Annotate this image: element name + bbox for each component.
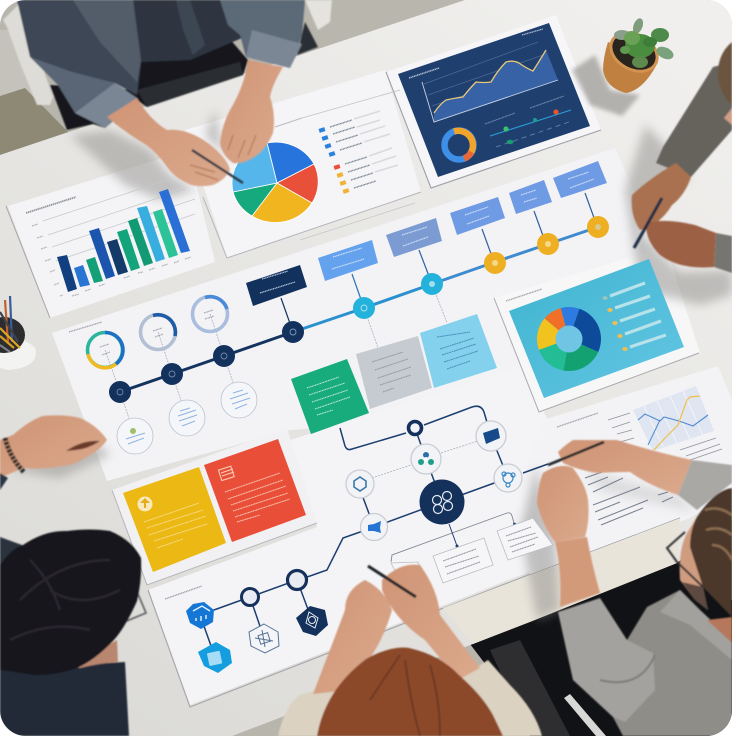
timeline connector lines — [120, 227, 598, 392]
paper: donut chart sheet — [494, 247, 700, 412]
left sleeve — [17, 0, 141, 95]
node: hub — [420, 480, 464, 524]
box: blue 5 — [553, 161, 607, 198]
donut chart — [537, 307, 601, 371]
shirt — [133, 0, 242, 62]
pen — [192, 150, 243, 183]
sweater sleeve — [558, 598, 655, 722]
person: bottom right with glasses and grey sweater — [537, 440, 732, 736]
mini timeline — [485, 96, 572, 147]
flowchart connectors — [200, 406, 548, 657]
lower cuff — [714, 233, 732, 273]
ring node 2 — [242, 588, 258, 606]
paper: flowchart and hexagon sheet — [148, 368, 610, 707]
icon: network in flowchart node — [418, 452, 434, 465]
forearm sleeve — [678, 460, 732, 510]
vertical forearm — [555, 537, 600, 607]
node: ring — [408, 422, 422, 434]
pencil cup — [0, 296, 36, 370]
pie chart — [232, 142, 318, 223]
timeline lower circles — [117, 382, 257, 454]
hexagon: calendar — [198, 642, 232, 673]
glasses — [667, 532, 703, 587]
person: bottom left, dark hair and glasses — [0, 530, 146, 736]
section heading — [165, 586, 202, 599]
box: navy — [246, 265, 307, 306]
table beige area below the sheet — [443, 518, 680, 644]
icon: blue arrow star — [368, 521, 381, 533]
pie chart legend — [275, 90, 415, 240]
hexagon: navy — [296, 606, 328, 636]
chart title — [26, 197, 76, 213]
right sleeve — [220, 0, 305, 68]
timeline stems — [105, 193, 597, 436]
dashboard donut — [444, 130, 474, 160]
sweater body — [613, 590, 732, 736]
chair left — [3, 3, 53, 105]
box: blue 3 — [450, 197, 505, 235]
flowchart note boxes — [391, 513, 553, 583]
hair — [0, 530, 141, 675]
dark dashboard panel — [398, 23, 590, 177]
hair — [317, 647, 503, 736]
shoulder — [0, 537, 40, 620]
paper: dark dashboard sheet — [386, 15, 601, 188]
neck — [707, 617, 732, 643]
pot — [603, 42, 658, 93]
bar chart — [26, 179, 195, 296]
bracelet — [5, 438, 24, 472]
icon: cog outline — [502, 472, 515, 487]
face — [680, 517, 708, 610]
progress rings — [88, 296, 228, 368]
paper: line chart sheet — [520, 366, 732, 575]
chair right — [305, 0, 332, 30]
line chart — [557, 386, 722, 525]
icon: hexagon ring — [354, 477, 366, 491]
lower hand — [537, 466, 589, 542]
lower hand — [646, 221, 716, 268]
box: blue 4 — [509, 180, 552, 214]
hair — [718, 42, 732, 105]
sweater — [278, 660, 542, 736]
left forearm and hand — [313, 580, 392, 694]
left forearm and hand — [107, 98, 230, 186]
icon: document tray — [218, 466, 234, 481]
timeline boxes — [246, 161, 607, 306]
person: left hand with bracelet — [0, 415, 107, 490]
card: light blue — [420, 314, 497, 388]
flowchart nodes — [346, 421, 522, 540]
pen — [634, 198, 662, 248]
paper: yellow and red card sheet — [112, 428, 317, 585]
plant shadow — [572, 55, 640, 116]
bars — [57, 189, 190, 292]
hexagon: home — [186, 602, 214, 629]
box: steel blue — [386, 218, 442, 257]
plant in terracotta pot — [602, 17, 675, 93]
paper: bar chart sheet — [6, 150, 215, 318]
upper hand — [632, 163, 691, 230]
skin neck and ear — [60, 640, 118, 668]
section title: rings — [69, 322, 102, 332]
face — [724, 108, 732, 125]
person: top, grey-blue jacket — [3, 0, 332, 186]
right forearm and hand — [382, 565, 480, 680]
pen — [368, 566, 416, 597]
shirt — [0, 662, 129, 736]
person: right, grey sweater with hands — [632, 42, 732, 273]
ring node 1 — [288, 570, 306, 590]
paper: pie chart sheet — [185, 70, 421, 258]
colour cards: green, grey, light blue — [291, 314, 497, 434]
hexagon workflow — [165, 570, 328, 673]
icon: folder — [483, 428, 500, 444]
panel heading — [506, 289, 542, 301]
legend rows — [602, 283, 666, 351]
horizontal forearm and upper hand — [558, 440, 692, 495]
panel heading — [409, 68, 439, 78]
right forearm and hand — [220, 60, 283, 163]
left cuff — [75, 83, 137, 128]
shadows on the table — [10, 110, 732, 620]
yellow card — [123, 467, 226, 572]
pen — [548, 442, 604, 465]
icon: upload in circle — [138, 496, 152, 512]
donut chart panel — [506, 259, 684, 398]
hair — [690, 488, 732, 617]
axis labels — [32, 224, 191, 296]
red card — [204, 439, 306, 542]
sleeve — [656, 62, 732, 177]
card: green — [291, 359, 369, 434]
timeline nodes — [109, 216, 609, 403]
card: grey — [356, 336, 432, 409]
person: bottom centre with red hair — [278, 565, 542, 736]
area chart — [422, 50, 558, 122]
paper: main timeline sheet — [52, 148, 660, 481]
leaves — [614, 17, 675, 68]
dark seat and trousers — [50, 30, 248, 130]
box: light blue 1 — [318, 240, 378, 281]
glasses — [100, 594, 146, 632]
hexagon: outline — [249, 624, 279, 653]
